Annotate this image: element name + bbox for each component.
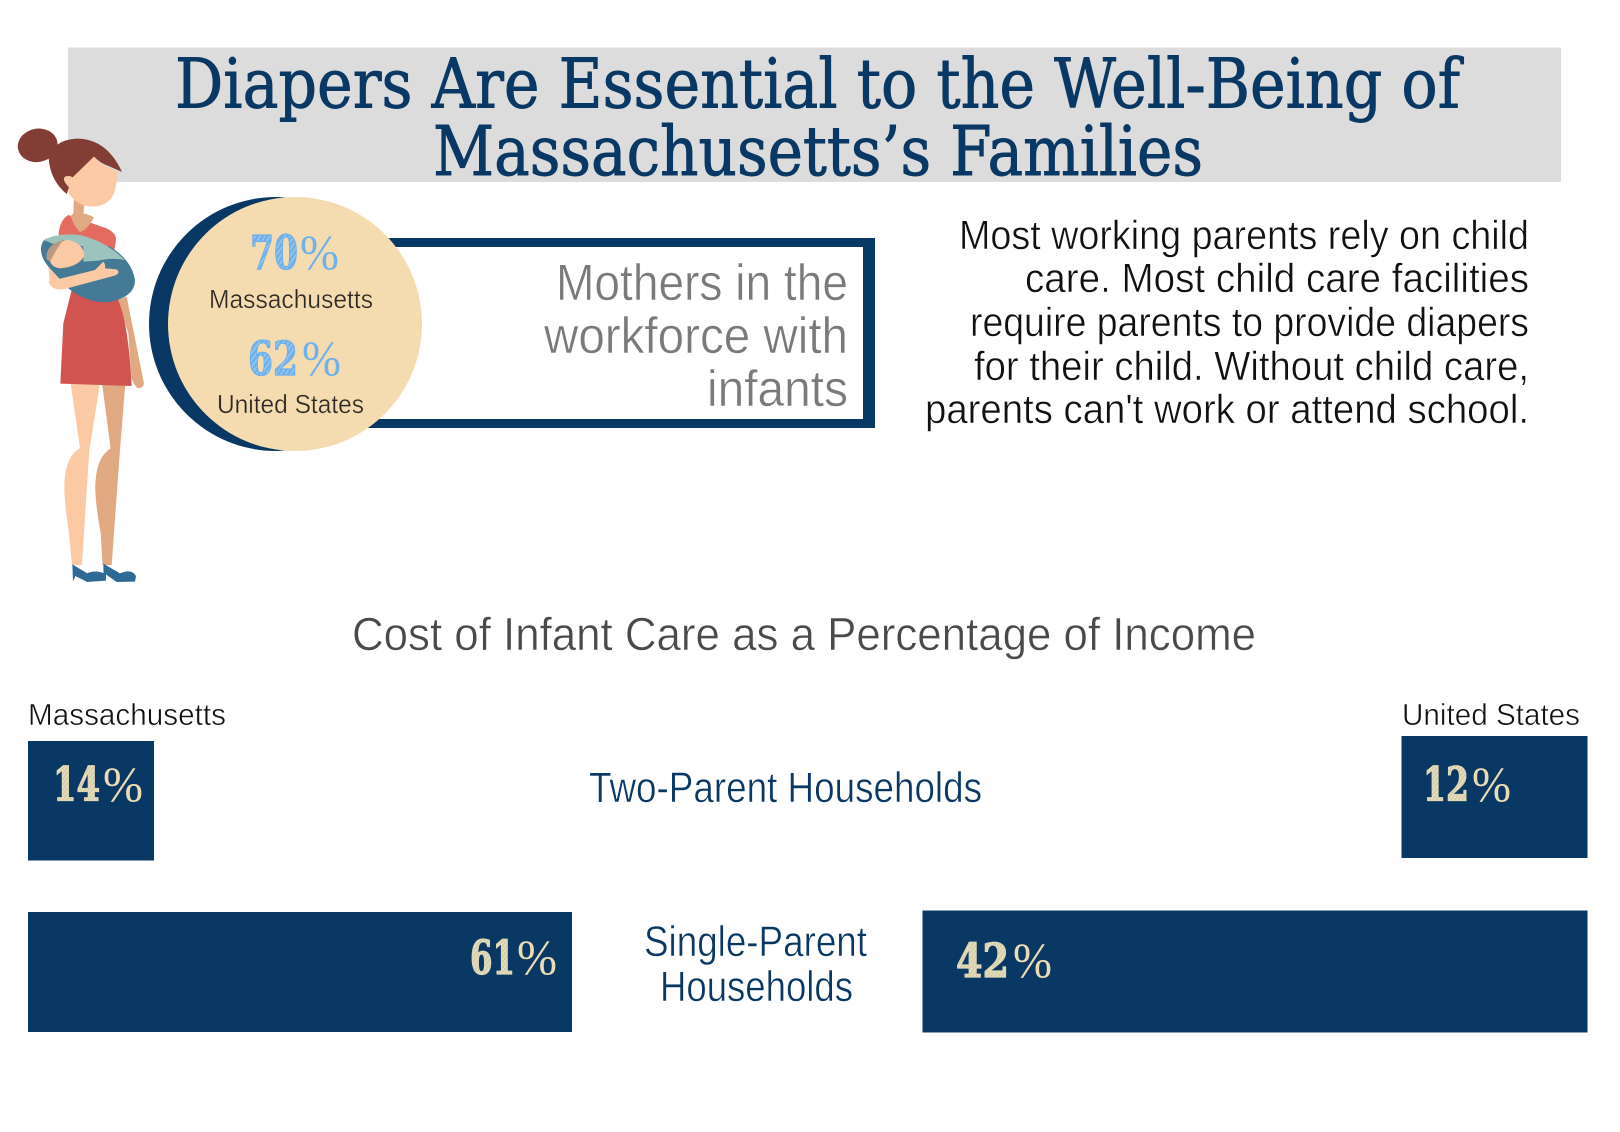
stat: Massachusetts 70% (209, 224, 373, 314)
blanket light (44, 234, 125, 262)
bar: Massachusetts two-parent 14%: 14 (53, 758, 100, 812)
stat: Massachusetts 70%: % (300, 224, 339, 280)
hair (49, 139, 122, 194)
title banner (68, 46, 1561, 192)
title line 2: Massachusetts’s Families (433, 113, 1203, 192)
bar: United States single-parent 42%: 42 (956, 934, 1009, 989)
blanket dark (41, 238, 135, 302)
stat: United States 62% (217, 330, 364, 419)
label: single-parent households (644, 918, 867, 1011)
stat: United States 62%: % (302, 330, 341, 386)
neck (71, 197, 94, 232)
panel text (543, 254, 848, 417)
label: single-parent households: Households (660, 963, 853, 1011)
legend label: Massachusetts: Massachusetts (28, 697, 226, 732)
shoes (72, 564, 136, 582)
panel text: Mothers in the (556, 254, 848, 311)
dress top (59, 215, 116, 257)
bar: United States single-parent 42% (922, 910, 1588, 1032)
stat: United States 62%: United States (217, 389, 364, 419)
stat: Massachusetts 70%: Massachusetts (209, 284, 373, 314)
legend label: United States: United States (1402, 697, 1580, 732)
text block: child care explanation: require parents to provide diapers (970, 299, 1529, 345)
stat: United States 62%: 62 (248, 332, 298, 387)
panel text: infants (707, 360, 848, 417)
label: two-parent households: Two-Parent Households (589, 764, 982, 812)
baby head (50, 240, 84, 268)
text block: child care explanation: parents can't work or attend school. (925, 386, 1529, 432)
bar: Massachusetts two-parent 14% (28, 741, 154, 860)
illustration: mother holding baby (15, 125, 144, 582)
bar: United States single-parent 42%: % (1013, 932, 1052, 988)
face (64, 157, 117, 207)
dress skirt (60, 290, 132, 386)
bar: Massachusetts single-parent 61% (28, 912, 572, 1032)
bar: United States two-parent 12% (1402, 736, 1588, 858)
circle: workforce statistics (149, 197, 422, 451)
text block: child care explanation: care. Most child care facilities (1025, 255, 1529, 301)
arm behind baby (48, 267, 80, 289)
front leg (64, 383, 100, 565)
panel: mothers in the workforce (290, 238, 875, 428)
label: single-parent households: Single-Parent (644, 918, 867, 966)
bar: Massachusetts single-parent 61%: % (517, 929, 557, 985)
panel text: workforce with (543, 307, 848, 364)
chart heading: Cost of Infant Care as a Percentage of Income (352, 608, 1256, 660)
back arm (117, 297, 144, 388)
stat: Massachusetts 70%: 70 (250, 226, 298, 281)
text block: child care explanation: Most working parents rely on child (959, 212, 1529, 258)
bar: United States two-parent 12%: 12 (1423, 758, 1469, 812)
bar: Massachusetts single-parent 61%: 61 (470, 931, 515, 986)
title line 1: Diapers Are Essential to the Well-Being of (175, 46, 1464, 124)
hair bun (15, 125, 60, 165)
baby hair (47, 240, 63, 262)
text block: child care explanation (925, 212, 1529, 432)
bar: Massachusetts two-parent 14%: % (103, 756, 143, 812)
text block: child care explanation: for their child. Without child care, (974, 343, 1529, 389)
frame (290, 238, 875, 428)
mother hand (48, 262, 119, 290)
bar: United States two-parent 12%: % (1472, 756, 1511, 812)
back leg (95, 383, 125, 565)
